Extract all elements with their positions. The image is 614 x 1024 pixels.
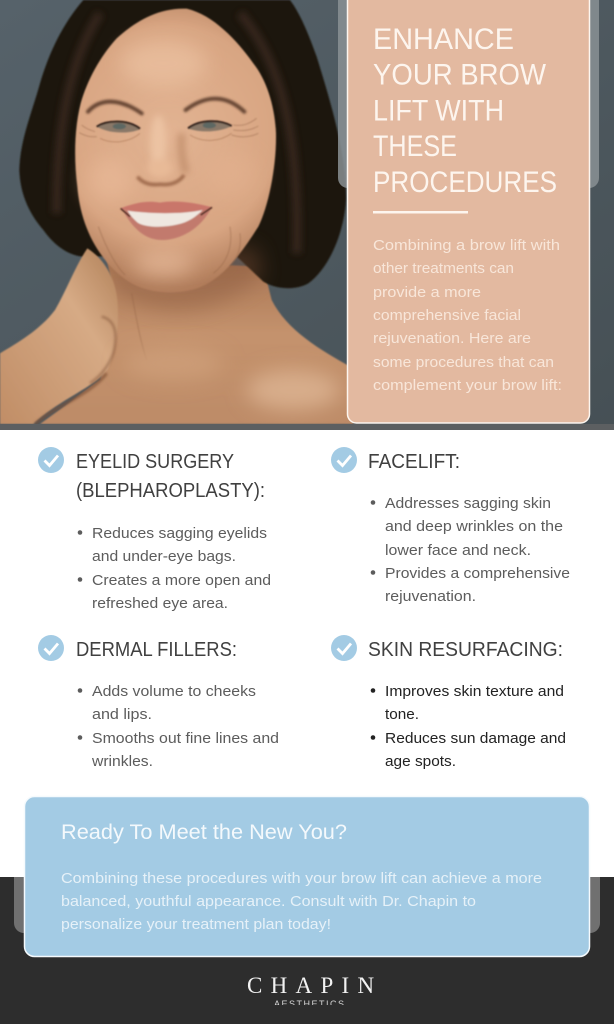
bullet list: rejuvenation. [385, 589, 476, 605]
section: skin resurfacing [331, 635, 566, 770]
eyes [97, 121, 232, 142]
bullet list: Creates a more open and [92, 573, 271, 589]
wrinkles [79, 118, 258, 360]
panel: peach intro [348, 0, 590, 423]
icon: check circle [331, 635, 357, 661]
bullet list: Reduces sun damage and [385, 731, 566, 747]
bullet list [78, 684, 279, 770]
bullet list: Adds volume to cheeks [92, 684, 256, 700]
title: THESE [373, 130, 457, 163]
intro paragraph: other treatments can [373, 261, 514, 277]
heading [76, 451, 265, 502]
mouth [121, 201, 212, 240]
intro paragraph: provide a more [373, 285, 481, 301]
footer background [0, 877, 614, 1024]
bullet list: refreshed eye area. [92, 596, 228, 612]
hair brown tones [57, 13, 297, 253]
logo: Chapin Aesthetics: AESTHETICS [274, 999, 346, 1009]
title: PROCEDURES [373, 166, 557, 199]
photo bottom strip [0, 424, 614, 430]
nose [137, 115, 186, 185]
bullet list: Improves skin texture and [385, 684, 564, 700]
intro paragraph: complement your brow lift: [373, 378, 562, 394]
fingers shadow [90, 317, 116, 383]
heading: SKIN RESURFACING: [368, 639, 563, 661]
bullet list: Smooths out fine lines and [92, 731, 279, 747]
bullet list: Addresses sagging skin [385, 496, 551, 512]
call to action text: personalize your treatment plan today! [61, 917, 331, 933]
logo: Chapin Aesthetics [248, 978, 374, 1005]
call to action heading: Ready To Meet the New You? [61, 821, 347, 844]
chest highlight [123, 347, 340, 410]
bullet list: and lips. [92, 707, 152, 723]
neck shadow [113, 247, 263, 311]
section: facelift [331, 447, 570, 605]
photo: smiling woman portrait [0, 0, 614, 424]
intro paragraph [373, 238, 562, 394]
intro paragraph: Combining a brow lift with [373, 238, 560, 254]
icon: check circle [38, 447, 64, 473]
title: LIFT WITH [373, 94, 504, 128]
title rule [373, 211, 468, 214]
panel background [348, 0, 590, 423]
bullet list: and deep wrinkles on the [385, 519, 563, 535]
bullet list: Reduces sagging eyelids [92, 526, 267, 542]
translucent panel behind title [338, 0, 599, 188]
call to action text: Combining these procedures with your brow lift can achieve a more [61, 871, 542, 887]
forehead and cheek highlights [74, 38, 204, 284]
bullet list: tone. [385, 707, 419, 723]
photo background [0, 0, 614, 424]
intro paragraph: comprehensive facial [373, 308, 521, 324]
logo: Chapin Aesthetics: CHAPIN [247, 973, 382, 998]
shadow between arm and chest [35, 373, 107, 424]
section: eyelid surgery [38, 447, 271, 612]
bullet list [371, 684, 566, 770]
face [75, 9, 276, 292]
bullet list: lower face and neck. [385, 543, 531, 559]
panel: call to action [24, 796, 590, 956]
eyebrows [88, 99, 244, 113]
heading: EYELID SURGERY [76, 451, 234, 473]
call to action text [61, 871, 542, 933]
heading: FACELIFT: [368, 451, 460, 473]
bullet list: age spots. [385, 754, 456, 770]
call to action text: balanced, youthful appearance. Consult with Dr. Chapin to [61, 894, 476, 910]
panel background [24, 796, 590, 956]
title: YOUR BROW [373, 58, 547, 92]
section: dermal fillers [38, 635, 279, 770]
heading: DERMAL FILLERS: [76, 639, 237, 661]
neck and shoulders [40, 260, 353, 424]
arm and hand [0, 248, 118, 424]
portrait figure [0, 0, 353, 424]
intro paragraph: rejuvenation. Here are [373, 331, 531, 347]
icon: check circle [331, 447, 357, 473]
title [373, 23, 557, 199]
icon: check circle [38, 635, 64, 661]
bullet list: Provides a comprehensive [385, 566, 570, 582]
bullet list: and under-eye bags. [92, 549, 236, 565]
bullet list [78, 526, 271, 612]
title: ENHANCE [373, 23, 514, 56]
hair [19, 0, 346, 288]
translucent panel behind call to action [14, 877, 600, 933]
bullet list: wrinkles. [91, 754, 153, 770]
bullet list [371, 496, 570, 605]
intro paragraph: some procedures that can [373, 355, 554, 371]
heading: (BLEPHAROPLASTY): [76, 480, 265, 502]
